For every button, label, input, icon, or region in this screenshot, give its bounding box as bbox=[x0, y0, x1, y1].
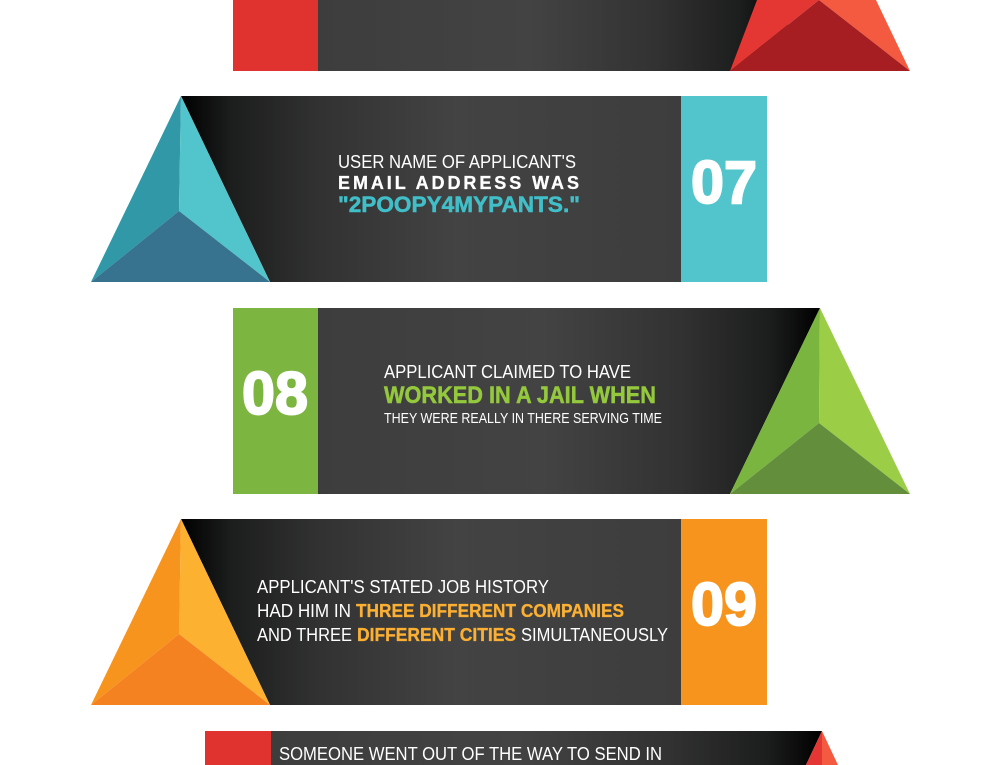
panel: item 06 banner (cropped) bbox=[233, 0, 910, 71]
panel: item 08 banner bbox=[233, 308, 910, 494]
text: item 07 description bbox=[338, 152, 580, 217]
text: item 08 description: APPLICANT CLAIMED TO HAVE bbox=[384, 362, 631, 382]
number: 07: 07 bbox=[691, 149, 757, 216]
text: item 09 description: HAD HIM IN bbox=[257, 601, 351, 621]
panel: item 09 banner bbox=[91, 519, 767, 705]
number: 09: 09 bbox=[691, 571, 757, 638]
text: item 08 description: THEY WERE REALLY IN THERE SERVING TIME bbox=[384, 410, 662, 427]
icon: red pyramid (cropped) bbox=[806, 731, 838, 765]
text: item 07 description: EMAIL ADDRESS WAS bbox=[338, 173, 579, 193]
number: 08: 08 bbox=[242, 360, 308, 427]
icon: green pyramid bbox=[730, 308, 910, 494]
text: item 07 description: "2POOPY4MYPANTS." bbox=[338, 192, 580, 217]
text: item 09 description bbox=[257, 577, 668, 645]
text: item 09 description: APPLICANT'S STATED JOB HISTORY bbox=[257, 577, 549, 597]
text: item 09 description: DIFFERENT CITIES bbox=[357, 625, 516, 645]
icon: teal pyramid bbox=[91, 96, 270, 282]
text: item 10 description: SOMEONE WENT OUT OF THE WAY TO SEND IN bbox=[279, 744, 662, 764]
text: item 09 description: AND THREE bbox=[257, 625, 352, 645]
icon: orange pyramid bbox=[91, 519, 270, 705]
text: item 08 description bbox=[384, 362, 662, 427]
panel: item 07 banner bbox=[91, 96, 767, 282]
icon: red pyramid bbox=[730, 0, 910, 71]
text: item 09 description: THREE DIFFERENT COMPANIES bbox=[356, 601, 624, 621]
text: item 09 description: SIMULTANEOUSLY bbox=[521, 625, 668, 645]
text: item 08 description: WORKED IN A JAIL WHEN bbox=[384, 382, 656, 409]
panel: item 10 banner (cropped) bbox=[205, 731, 838, 765]
text: item 07 description: USER NAME OF APPLICANT'S bbox=[338, 152, 576, 172]
